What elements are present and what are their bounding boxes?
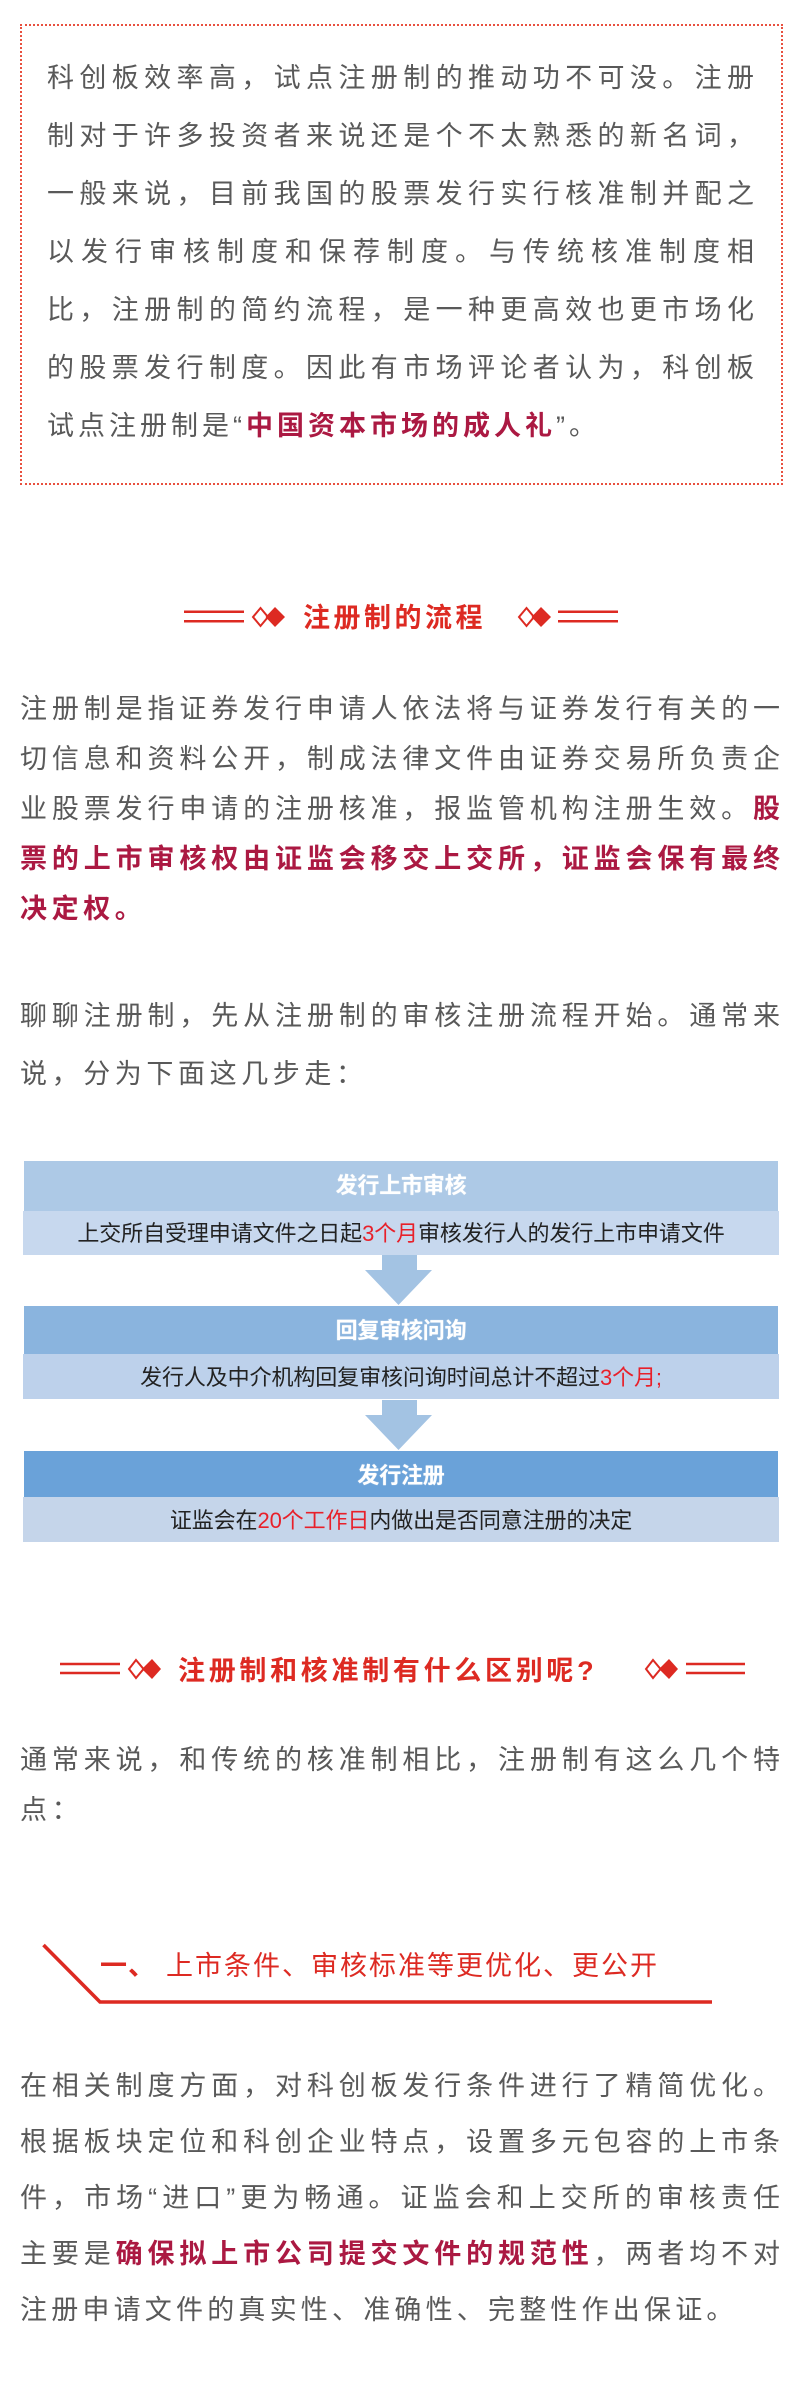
text block: intro paragraph: 以发行审核制度和保荐制度。与传统核准制度相 <box>47 237 754 267</box>
step 2 description: 发行人及中介机构回复审核问询时间总计不超过3个月; <box>140 1365 662 1390</box>
step 1 description: 上交所自受理申请文件之日起3个月审核发行人的发行上市申请文件 <box>77 1221 725 1246</box>
text block: point one explanation: 件，市场“进口”更为畅通。证监会和上交所的审核责任 <box>20 2183 780 2213</box>
step 3 description: 证监会在20个工作日内做出是否同意注册的决定 <box>170 1508 632 1533</box>
subheading: point one with angled underline <box>42 1944 712 2004</box>
text block: definition of registration system: 决定权。 <box>20 894 146 924</box>
heading: 注册制的流程 <box>184 603 618 633</box>
text block: intro paragraph: 科创板效率高，试点注册制的推动功不可没。注册 <box>47 63 754 93</box>
text block: point one explanation: 在相关制度方面，对科创板发行条件进行了精简优化。 <box>20 2071 780 2101</box>
text block: comparison lead-in: 点： <box>20 1795 83 1825</box>
text block: intro paragraph: 制对于许多投资者来说还是个不太熟悉的新名词， <box>47 121 754 151</box>
text block: process lead-in: 说，分为下面这几步走： <box>20 1059 368 1089</box>
heading text: 注册制的流程 <box>303 603 486 633</box>
arrow: step 1 to step 2 <box>365 1255 432 1305</box>
step 1 description <box>23 1211 779 1255</box>
text block: definition of registration system: 票的上市审核权由证监会移交上交所，证监会保有最终 <box>20 844 780 874</box>
heading text: 注册制和核准制有什么区别呢? <box>178 1656 597 1686</box>
text block: point one explanation <box>20 2071 780 2325</box>
text block: intro paragraph: 试点注册制是“中国资本市场的成人礼”。 <box>47 411 600 441</box>
step 2 description <box>23 1354 779 1399</box>
text block: definition of registration system: 业股票发行申请的注册核准，报监管机构注册生效。股 <box>20 794 780 824</box>
text block: intro paragraph: 的股票发行制度。因此有市场评论者认为，科创板 <box>47 353 754 383</box>
text block: point one explanation: 主要是确保拟上市公司提交文件的规范性，两者均不对 <box>20 2239 780 2269</box>
text block: point one explanation: 根据板块定位和科创企业特点，设置多元包容的上市条 <box>20 2127 780 2157</box>
text block: comparison lead-in: 通常来说，和传统的核准制相比，注册制有这么几个特 <box>20 1745 780 1775</box>
text block: intro paragraph <box>47 63 754 441</box>
text block: intro paragraph: 比，注册制的简约流程，是一种更高效也更市场化 <box>47 295 754 325</box>
step 3 header: 发行注册 <box>357 1463 445 1488</box>
text block: definition of registration system: 注册制是指证券发行申请人依法将与证券发行有关的一 <box>20 694 780 724</box>
step 2 header: 回复审核问询 <box>336 1318 466 1343</box>
icon: left double rule and diamonds <box>184 606 285 628</box>
step 3 header <box>24 1451 778 1497</box>
arrow: step 2 to step 3 <box>365 1400 432 1450</box>
text block: process lead-in: 聊聊注册制，先从注册制的审核注册流程开始。通常来 <box>20 1001 780 1031</box>
subheading text: 一、 上市条件、审核标准等更优化、更公开 <box>100 1951 659 1981</box>
text block: definition of registration system: 切信息和资料公开，制成法律文件由证券交易所负责企 <box>20 744 780 774</box>
flow chart: three registration steps <box>23 1161 779 1542</box>
text block: point one explanation: 注册申请文件的真实性、准确性、完整性作出保证。 <box>20 2295 738 2325</box>
icon: left double rule and diamonds <box>60 1658 161 1680</box>
text block: comparison lead-in <box>20 1745 780 1825</box>
icon: right diamonds and double rule <box>644 1658 745 1680</box>
text block: definition of registration system <box>20 694 780 924</box>
step 1 header: 发行上市审核 <box>336 1173 466 1198</box>
step 1 header <box>24 1161 778 1211</box>
text block: process lead-in <box>20 1001 780 1089</box>
heading: 注册制和核准制有什么区别呢 <box>60 1656 745 1686</box>
icon: angled red underline <box>42 1944 712 2004</box>
icon: right diamonds and double rule <box>518 606 618 628</box>
panel: intro dotted box <box>20 24 783 485</box>
step 3 description <box>23 1497 779 1542</box>
text block: intro paragraph: 一般来说，目前我国的股票发行实行核准制并配之 <box>47 179 754 209</box>
step 2 header <box>24 1306 778 1354</box>
